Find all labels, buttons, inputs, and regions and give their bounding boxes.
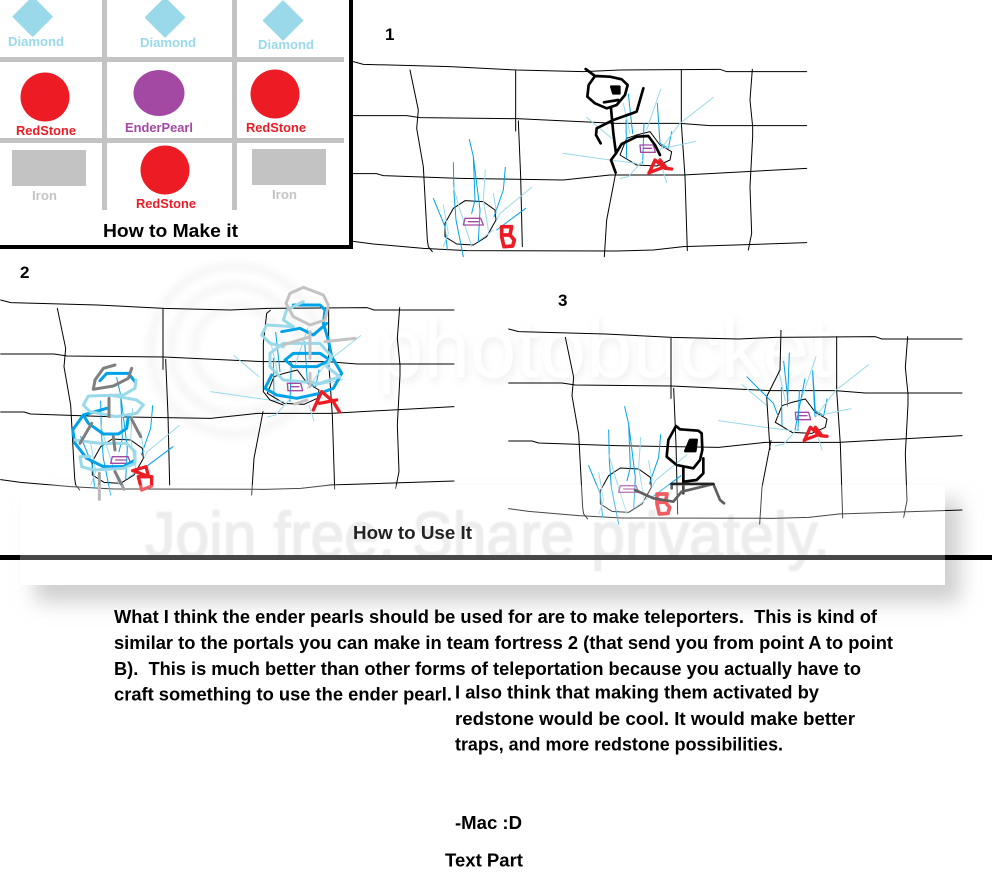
step 1 scene: [353, 62, 807, 257]
panel: crafting recipe: [0, 0, 351, 247]
text block: redstone idea: [455, 682, 855, 754]
iron and redstone row: [12, 146, 326, 211]
text block: teleporter idea: craft something to use the ender pearl.: [114, 684, 452, 704]
diamond row: Diamond: [140, 35, 196, 50]
signature: -Mac :D: [455, 813, 522, 833]
photobucket logo watermark: photobucket: [379, 305, 834, 399]
heading: how to make it: How to Make it: [103, 221, 238, 241]
text block: teleporter idea: similar to the portals you can make in team fortress 2 (that send you from point A to point: [114, 633, 893, 653]
step numbers: 2: [20, 263, 29, 282]
heading: how to use it: How to Use It: [353, 523, 472, 543]
heading: text part: Text Part: [445, 850, 523, 870]
redstone and ender pearl row: [16, 70, 306, 138]
text block: teleporter idea: [114, 607, 893, 704]
photobucket watermark shadow band: [20, 485, 960, 602]
iron and redstone row: Iron: [32, 188, 57, 203]
portal letters: [133, 392, 339, 490]
panel border: [0, 0, 351, 247]
diamond row: [8, 0, 314, 52]
redstone and ender pearl row: RedStone: [246, 120, 306, 135]
step 2 scene: [1, 287, 454, 499]
divider line: [0, 555, 992, 560]
diamond row: Diamond: [8, 34, 64, 49]
white band overlay: [20, 485, 945, 585]
photobucket logo watermark: [151, 266, 834, 434]
step numbers: 3: [558, 291, 567, 310]
upper part of center column and extra lines: [747, 330, 815, 450]
text block: teleporter idea: B). This is much better than other forms of teleportation because you actually have to: [114, 659, 861, 679]
text block: redstone idea: traps, and more redstone possibilities.: [455, 734, 783, 754]
step numbers: [20, 25, 567, 310]
crafting grid lines: [0, 0, 344, 210]
step 3 scene: [509, 329, 962, 524]
join free watermark text: Join free. Share privately.: [145, 499, 830, 571]
redstone and ender pearl row: RedStone: [16, 123, 76, 138]
iron and redstone row: Iron: [272, 187, 297, 202]
diamond row: Diamond: [258, 37, 314, 52]
redstone and ender pearl row: EnderPearl: [125, 120, 193, 135]
stick figure at portal B: [635, 426, 724, 503]
snow golems on portals: [73, 287, 355, 499]
step numbers: 1: [385, 25, 394, 44]
text block: redstone idea: redstone would be cool. It would make better: [455, 709, 855, 729]
stick figure at portal A: [586, 69, 660, 173]
text block: teleporter idea: What I think the ender pearls should be used for are to make teleporters. This is kind of: [114, 607, 878, 627]
text block: redstone idea: I also think that making them activated by: [455, 682, 819, 702]
photobucket logo watermark: photobucket: [377, 301, 832, 395]
iron and redstone row: RedStone: [136, 196, 196, 211]
